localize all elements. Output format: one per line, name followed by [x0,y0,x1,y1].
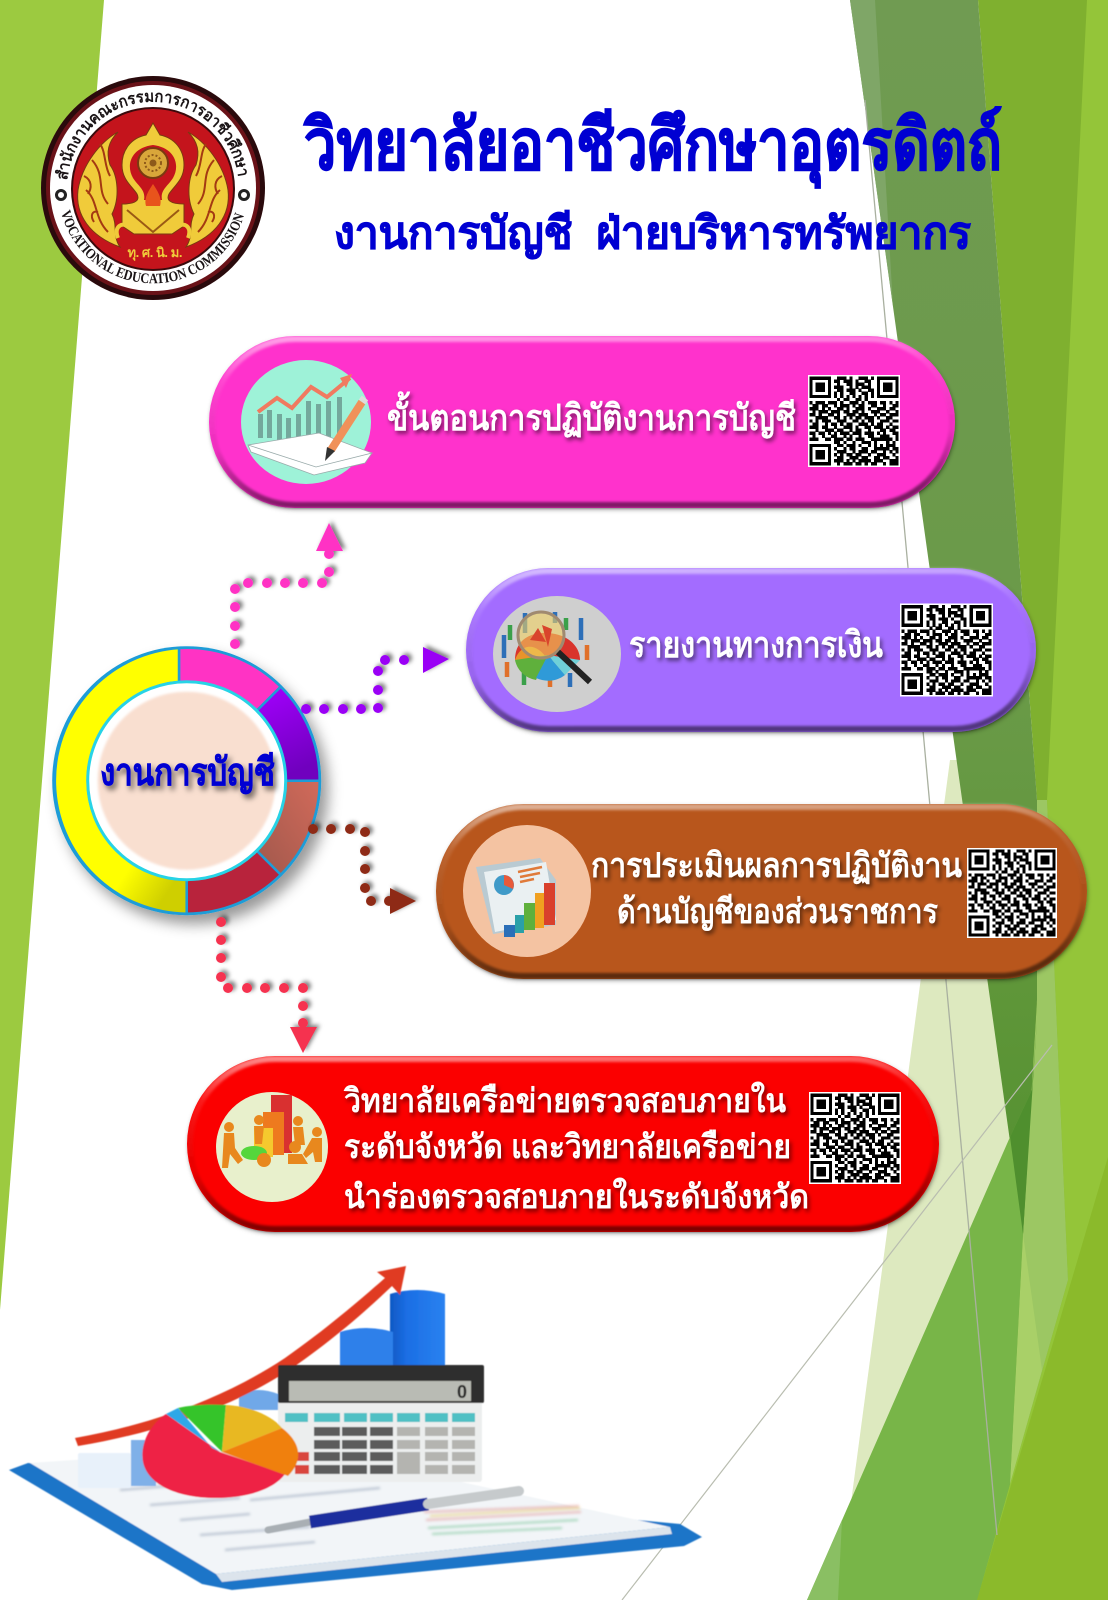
logo: Vocational Education Commission seal: VOCATIONAL EDUCATION COMMISSION [62,209,244,284]
icon: folder with bar chart [463,825,591,957]
arrow: wheel to purple panel [301,647,449,714]
logo: Vocational Education Commission seal: ทุ. ศ. นิ. ม. [127,245,182,261]
label: นำร่องตรวจสอบภายในระดับจังหวัด [344,1177,809,1215]
calculator: 0 [457,1382,467,1402]
panel: performance assessment (brown) [436,804,1087,979]
arrow: wheel to brown panel [308,824,416,914]
QR code [808,375,900,467]
label: การประเมินผลการปฏิบัติงาน [591,847,962,885]
arrow: wheel to red panel [216,917,317,1053]
pen [268,1491,519,1530]
panel: financial reports (purple) [466,568,1036,732]
icon: pie dome and magnifier [493,596,621,712]
panel: accounting procedure (pink) [209,336,955,508]
label: วิทยาลัยเครือข่ายตรวจสอบภายใน [344,1081,786,1119]
bar blocks [78,1290,445,1488]
label: รายงานทางการเงิน [629,624,883,665]
label: ระดับจังหวัด และวิทยาลัยเครือข่าย [344,1128,791,1165]
subtitle: งานการบัญชี ฝ่ายบริหารทรัพยากร [334,209,971,259]
growth arrow [75,1266,406,1446]
label [344,1081,809,1215]
clipboard [9,1445,702,1590]
QR code [900,604,993,696]
label: ขั้นตอนการปฏิบัติงานการบัญชี [387,391,796,439]
QR code [967,848,1057,938]
logo: Vocational Education Commission seal [41,76,265,300]
arrow: wheel to pink panel [230,523,343,649]
logo: Vocational Education Commission seal: สำนักงานคณะกรรมการการอาชีวศึกษา [54,92,247,180]
chart: central accounting wheel [52,646,321,915]
icon: chart and pencil [241,360,372,484]
panel: network colleges (red) [187,1056,939,1232]
illustration: calculator, charts and clipboard [9,1266,702,1590]
label: ด้านบัญชีของส่วนราชการ [617,893,939,932]
label [591,847,962,932]
pie chart [142,1405,298,1498]
icon: people around bar chart [216,1092,328,1202]
QR code [809,1092,901,1184]
calculator [278,1365,484,1482]
wheel label: งานการบัญชี [100,752,275,794]
